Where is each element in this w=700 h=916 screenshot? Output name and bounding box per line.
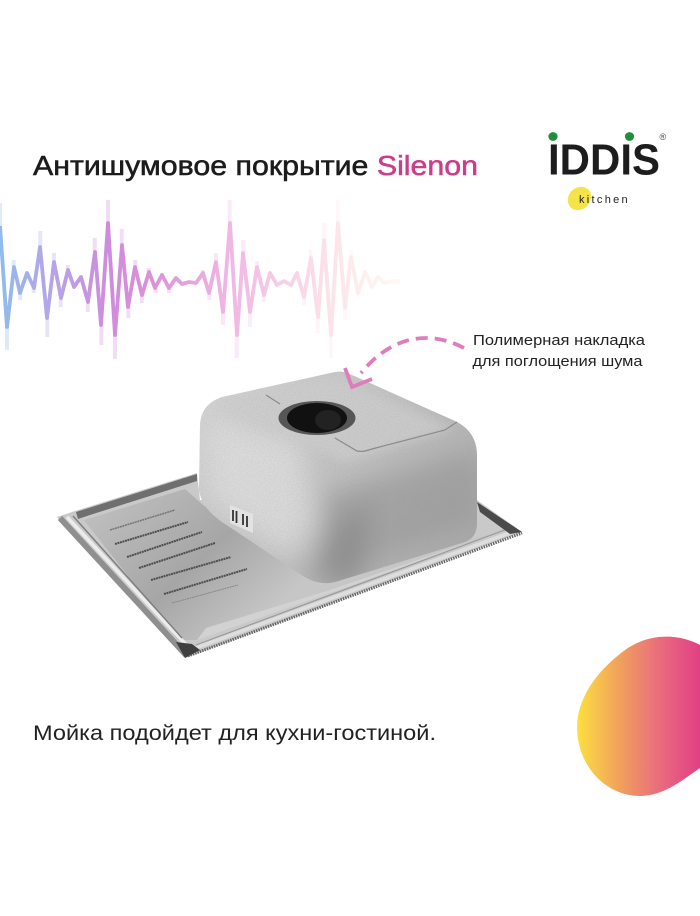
yellow spot xyxy=(568,187,591,210)
overflow badge xyxy=(230,505,253,533)
front rail xyxy=(188,528,522,656)
bottom note: Мойка подойдет для кухни-гостиной. xyxy=(33,722,436,745)
back rim xyxy=(76,474,197,519)
wave ghost bars xyxy=(0,200,358,359)
callout line 2: для поглощения шума xyxy=(472,354,644,370)
pan soft highlight xyxy=(197,533,500,640)
polymer pad outline xyxy=(266,395,457,451)
flange xyxy=(57,473,522,658)
grain xyxy=(199,372,465,576)
logo wordmark: IDDIS xyxy=(548,136,660,184)
bowl shading xyxy=(195,368,480,590)
arrow to polymer pad xyxy=(345,338,464,387)
grooves xyxy=(110,510,247,603)
logo: IDDIS kitchen xyxy=(548,132,666,210)
shadow on the front xyxy=(308,508,371,583)
title: Антишумовое покрытие Silenon xyxy=(33,150,478,181)
logo dot left xyxy=(548,132,558,141)
drainer pan xyxy=(84,489,500,640)
corner xyxy=(176,642,200,658)
callout line 1: Полимерная накладка xyxy=(473,333,646,349)
bowl xyxy=(199,372,477,583)
left rail xyxy=(60,516,190,655)
logo subtitle: kitchen xyxy=(579,194,630,206)
arrow curve xyxy=(361,338,464,373)
logo dot right xyxy=(625,132,634,141)
gradient blob xyxy=(577,637,700,796)
arrowhead xyxy=(345,368,372,387)
highlight on the left xyxy=(205,420,315,560)
wave line xyxy=(0,223,400,335)
drain hole xyxy=(278,401,356,435)
callout text xyxy=(472,333,646,370)
right clip xyxy=(477,502,522,534)
highlight on top edge xyxy=(329,402,444,457)
registered mark: ® xyxy=(660,132,666,142)
sound wave xyxy=(0,200,400,359)
shadow on the corner xyxy=(320,452,477,562)
sink xyxy=(57,368,522,658)
